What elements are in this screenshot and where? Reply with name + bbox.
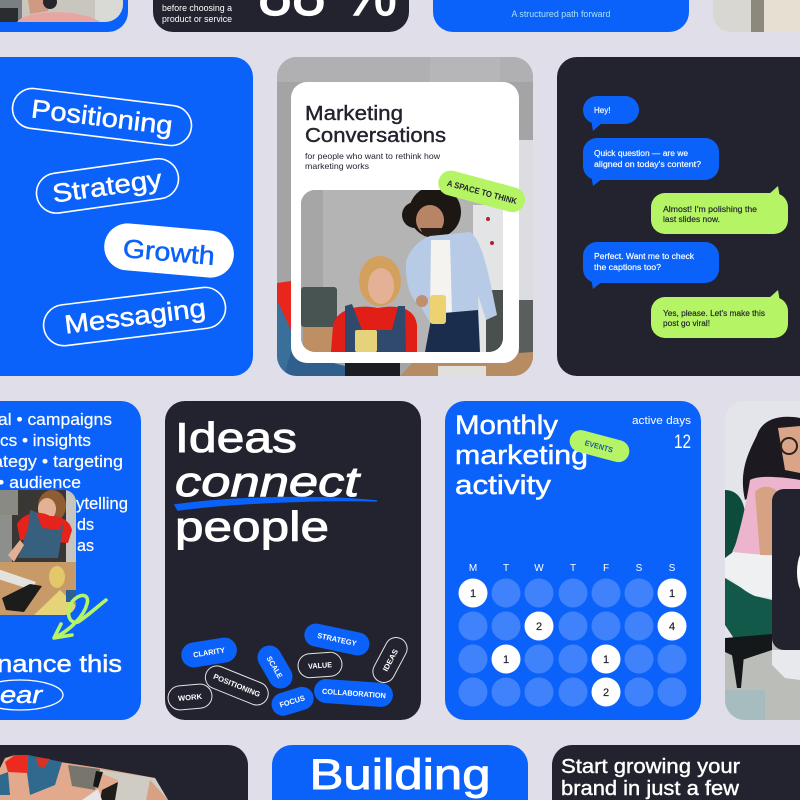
active day counts: 1	[669, 588, 675, 600]
tag: scale	[253, 641, 297, 693]
panel: Ideas connect people	[165, 401, 421, 720]
tag: focus: FOCUS	[278, 693, 306, 710]
message: Perfect	[583, 242, 719, 289]
pill: Strategy	[34, 156, 181, 216]
pill: Positioning	[10, 86, 194, 148]
emphasised word	[0, 680, 63, 710]
dark overlay card	[772, 489, 800, 650]
active days markers	[458, 578, 686, 706]
keyword lines: • audience	[0, 473, 81, 492]
tag: positioning: POSITIONING	[212, 672, 262, 699]
heading text: nance this	[0, 651, 122, 678]
title: Marketing	[305, 102, 403, 125]
pill: Strategy: Strategy	[50, 163, 164, 209]
weekday labels	[469, 563, 676, 574]
panel: Start growing card	[552, 745, 800, 800]
white card	[291, 82, 519, 363]
message: Almost: Almost! I'm polishing the	[663, 205, 758, 214]
pill: Growth	[102, 221, 236, 280]
tags	[167, 621, 411, 719]
brush underline	[175, 498, 377, 510]
message: Perfect: Perfect. Want me to check	[594, 252, 695, 261]
photo: hands writing	[0, 755, 168, 800]
message: Quick question: aligned on today's content?	[594, 160, 702, 169]
keyword lines: cs • insights	[0, 431, 91, 450]
keyword lines	[0, 410, 128, 555]
tag: collaboration: COLLABORATION	[322, 687, 386, 700]
message: Almost	[651, 186, 788, 234]
weekday labels: S	[636, 563, 643, 574]
floor	[725, 640, 800, 720]
tag: focus	[269, 684, 317, 719]
panel: monthly marketing activity calendar	[445, 401, 701, 720]
keyword lines: as	[77, 536, 94, 555]
caption: A structured path forward	[512, 9, 610, 19]
panel: Start growing card: brand in just a few	[561, 778, 740, 800]
active days	[632, 415, 692, 453]
tag: clarity: CLARITY	[193, 646, 226, 659]
panel: keyword word cloud with photo	[0, 401, 141, 720]
panel: monthly marketing activity calendar: activity	[455, 470, 552, 500]
panel: Ideas connect people: people	[175, 503, 329, 550]
panel: keyword pills	[0, 57, 253, 376]
message: Almost: last slides now.	[663, 215, 720, 224]
active day counts: 2	[536, 621, 542, 633]
calendar grid	[458, 578, 686, 706]
tag: ideas: IDEAS	[381, 648, 400, 673]
heading: Building	[310, 751, 490, 799]
heading: Start growing your	[561, 756, 740, 778]
weekday labels: F	[603, 563, 609, 574]
keyword lines: al • campaigns	[0, 410, 112, 429]
weekday labels: W	[534, 563, 544, 574]
message: Hey: Hey!	[594, 106, 610, 115]
weekday labels: M	[469, 563, 477, 574]
keyword lines: ds	[77, 515, 94, 534]
keyword lines: ytelling	[76, 494, 128, 513]
active days: active days	[632, 415, 692, 427]
headline: Ideas	[175, 414, 297, 461]
emphasised word: ear	[0, 682, 43, 709]
photo: two colleagues	[301, 186, 503, 352]
message: Yes please: post go viral!	[663, 319, 710, 328]
tag: events	[567, 428, 632, 465]
panel: top left photo card	[0, 0, 128, 32]
panel: right photo	[725, 401, 800, 720]
pill: Messaging: Messaging	[63, 292, 207, 340]
active day counts: 4	[669, 621, 675, 633]
panel: top right photo	[713, 0, 800, 32]
person	[725, 417, 800, 680]
tag: value	[297, 651, 343, 679]
tag: A space to think: A SPACE TO THINK	[446, 178, 519, 206]
tag: work	[167, 683, 213, 711]
overlay glyph	[797, 555, 800, 589]
panel: monthly marketing activity calendar: marketing	[455, 440, 588, 470]
panel: Marketing Conversations cover: marketing works	[305, 161, 369, 171]
active day counts: 1	[503, 654, 509, 666]
icon: lime arrow	[54, 595, 106, 638]
weekday labels: S	[669, 563, 676, 574]
tag: collaboration	[313, 678, 394, 708]
tag: work: WORK	[178, 692, 203, 703]
panel: Ideas connect people: connect	[175, 458, 362, 505]
panel: Building card	[272, 745, 528, 800]
panel: bottom left photo card	[0, 745, 248, 800]
panel: Marketing Conversations cover	[277, 57, 533, 376]
tag: scale: SCALE	[265, 655, 284, 680]
message: Quick question	[583, 138, 719, 186]
weekday labels: T	[503, 563, 509, 574]
subtitle: for people who want to rethink how	[305, 151, 441, 161]
tag: A space to think	[435, 168, 528, 215]
pill: Growth: Growth	[122, 233, 216, 271]
panel: statistic card: product or service	[162, 14, 232, 24]
chair	[725, 490, 772, 688]
message: Yes please	[651, 290, 788, 338]
tag: value: VALUE	[308, 660, 332, 671]
pill: Positioning: Positioning	[30, 93, 174, 141]
tag: ideas	[369, 634, 411, 686]
active day counts: 2	[603, 687, 609, 699]
panel: structured path card	[433, 0, 689, 32]
background photo	[277, 57, 533, 376]
active days: 12	[674, 432, 691, 453]
active day counts	[470, 588, 675, 699]
message: Perfect: the captions too?	[594, 263, 662, 272]
panel: statistic card	[153, 0, 409, 32]
weekday labels: T	[570, 563, 576, 574]
active day counts: 1	[470, 588, 476, 600]
pill: Messaging	[41, 285, 228, 348]
message: Yes please: Yes, please. Let's make this	[663, 309, 765, 318]
active day counts: 1	[603, 654, 609, 666]
statistic caption: before choosing a	[162, 3, 232, 13]
tag: clarity	[179, 636, 239, 669]
panel: Marketing Conversations cover: Conversations	[305, 124, 446, 147]
photo: person in pink top	[0, 0, 125, 22]
message: Quick question: Quick question — are we	[594, 149, 689, 158]
tag: strategy	[302, 621, 372, 658]
tag: positioning	[202, 662, 272, 708]
panel: chat conversation	[557, 57, 800, 376]
tag: events: EVENTS	[584, 438, 614, 455]
heading: Monthly	[455, 410, 559, 440]
photo: team at table	[0, 490, 76, 615]
message: Hey	[583, 96, 639, 131]
tag: strategy: STRATEGY	[316, 631, 357, 648]
